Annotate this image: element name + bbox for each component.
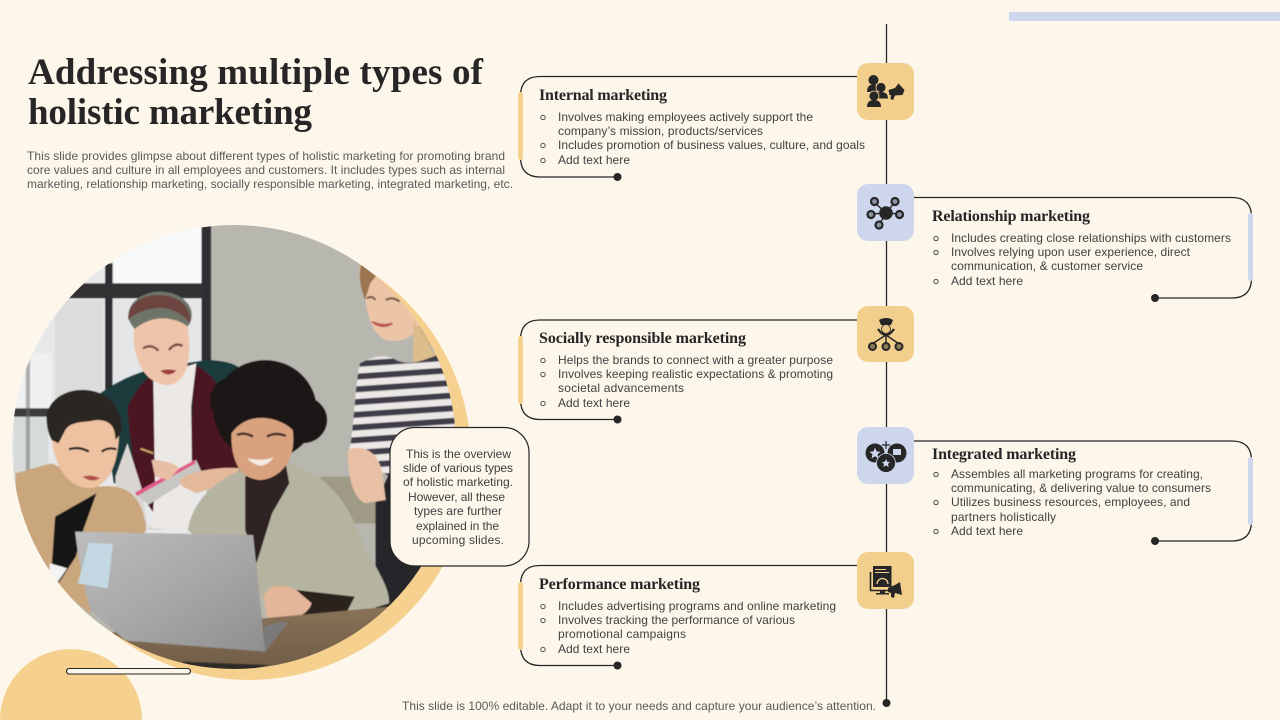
overview callout: of holistic marketing. [403,475,513,489]
panel: internal marketing [518,76,865,181]
panel: internal marketing: Includes promotion of business values, culture, and goals [558,138,865,152]
title: Addressing multiple types of [28,52,484,93]
overview callout: types are further [414,504,502,518]
panel: internal marketing: Add text here [558,153,630,167]
panel: socially responsible marketing: Involves keeping realistic expectations & promoting [558,367,833,381]
overview callout: However, all these [408,490,505,504]
panel: performance marketing [518,566,857,670]
panel: relationship marketing: Includes creating close relationships with customers [951,231,1231,245]
panel: relationship marketing: Involves relying upon user experience, direct [951,245,1191,259]
panel: relationship marketing [914,198,1253,302]
icon: performance dashboard with megaphone [857,552,914,609]
panel: internal marketing: Internal marketing [539,87,667,104]
footer note: This slide is 100% editable. Adapt it to your needs and capture your audience’s attention. [402,699,876,713]
title [28,52,484,133]
icon: team with megaphone [857,63,914,120]
panel: relationship marketing: communication, & customer service [951,259,1143,273]
description text [27,149,513,191]
panel: performance marketing: Performance marketing [539,576,700,593]
panel: integrated marketing: Utilizes business resources, employees, and [951,495,1190,509]
panel: performance marketing: Add text here [558,642,630,656]
panel: socially responsible marketing: Helps the brands to connect with a greater purpose [558,353,833,367]
icon: leader with connected people [857,306,914,362]
icon: network of people [857,184,914,241]
panel: integrated marketing [914,441,1253,545]
decorative yellow circle behind photo [27,236,471,680]
overview callout: explained in the [416,519,499,533]
panel: internal marketing: company’s mission, products/services [558,124,763,138]
pill outline [66,668,190,674]
panel: socially responsible marketing [518,320,857,424]
overview callout: upcoming slides. [412,533,504,547]
panel: integrated marketing: communicating, & delivering value to consumers [951,481,1211,495]
icon: three integrated badges [857,427,914,484]
panel: integrated marketing: Add text here [951,524,1023,538]
panel: performance marketing: Includes advertising programs and online marketing [558,599,836,613]
panel: socially responsible marketing: Add text here [558,396,630,410]
panel: socially responsible marketing: Socially responsible marketing [539,330,746,347]
panel: relationship marketing: Add text here [951,274,1023,288]
panel: socially responsible marketing: societal advancements [558,381,684,395]
top right accent bar [1009,12,1280,21]
description text: This slide provides glimpse about different types of holistic marketing for promoting brand [27,149,505,163]
decorative yellow half circle [0,649,142,720]
overview callout: slide of various types [403,461,513,475]
photo: team around a laptop [12,225,455,669]
overview callout [390,428,529,566]
panel: relationship marketing: Relationship marketing [932,208,1090,225]
panel: integrated marketing: Integrated marketing [932,446,1076,463]
description text: marketing, relationship marketing, socially responsible marketing, integrated marketing, etc. [27,177,513,191]
timeline vertical line [882,24,890,707]
panel: performance marketing: Involves tracking the performance of various [558,613,795,627]
panel: performance marketing: promotional campaigns [558,627,686,641]
panel: integrated marketing: partners holistically [951,510,1056,524]
panel: internal marketing: Involves making employees actively support the [558,110,813,124]
overview callout: This is the overview [406,447,511,461]
title: holistic marketing [28,92,312,133]
panel: integrated marketing: Assembles all marketing programs for creating, [951,467,1203,481]
description text: core values and culture in all employees and customers. It includes types such as internal [27,163,505,177]
